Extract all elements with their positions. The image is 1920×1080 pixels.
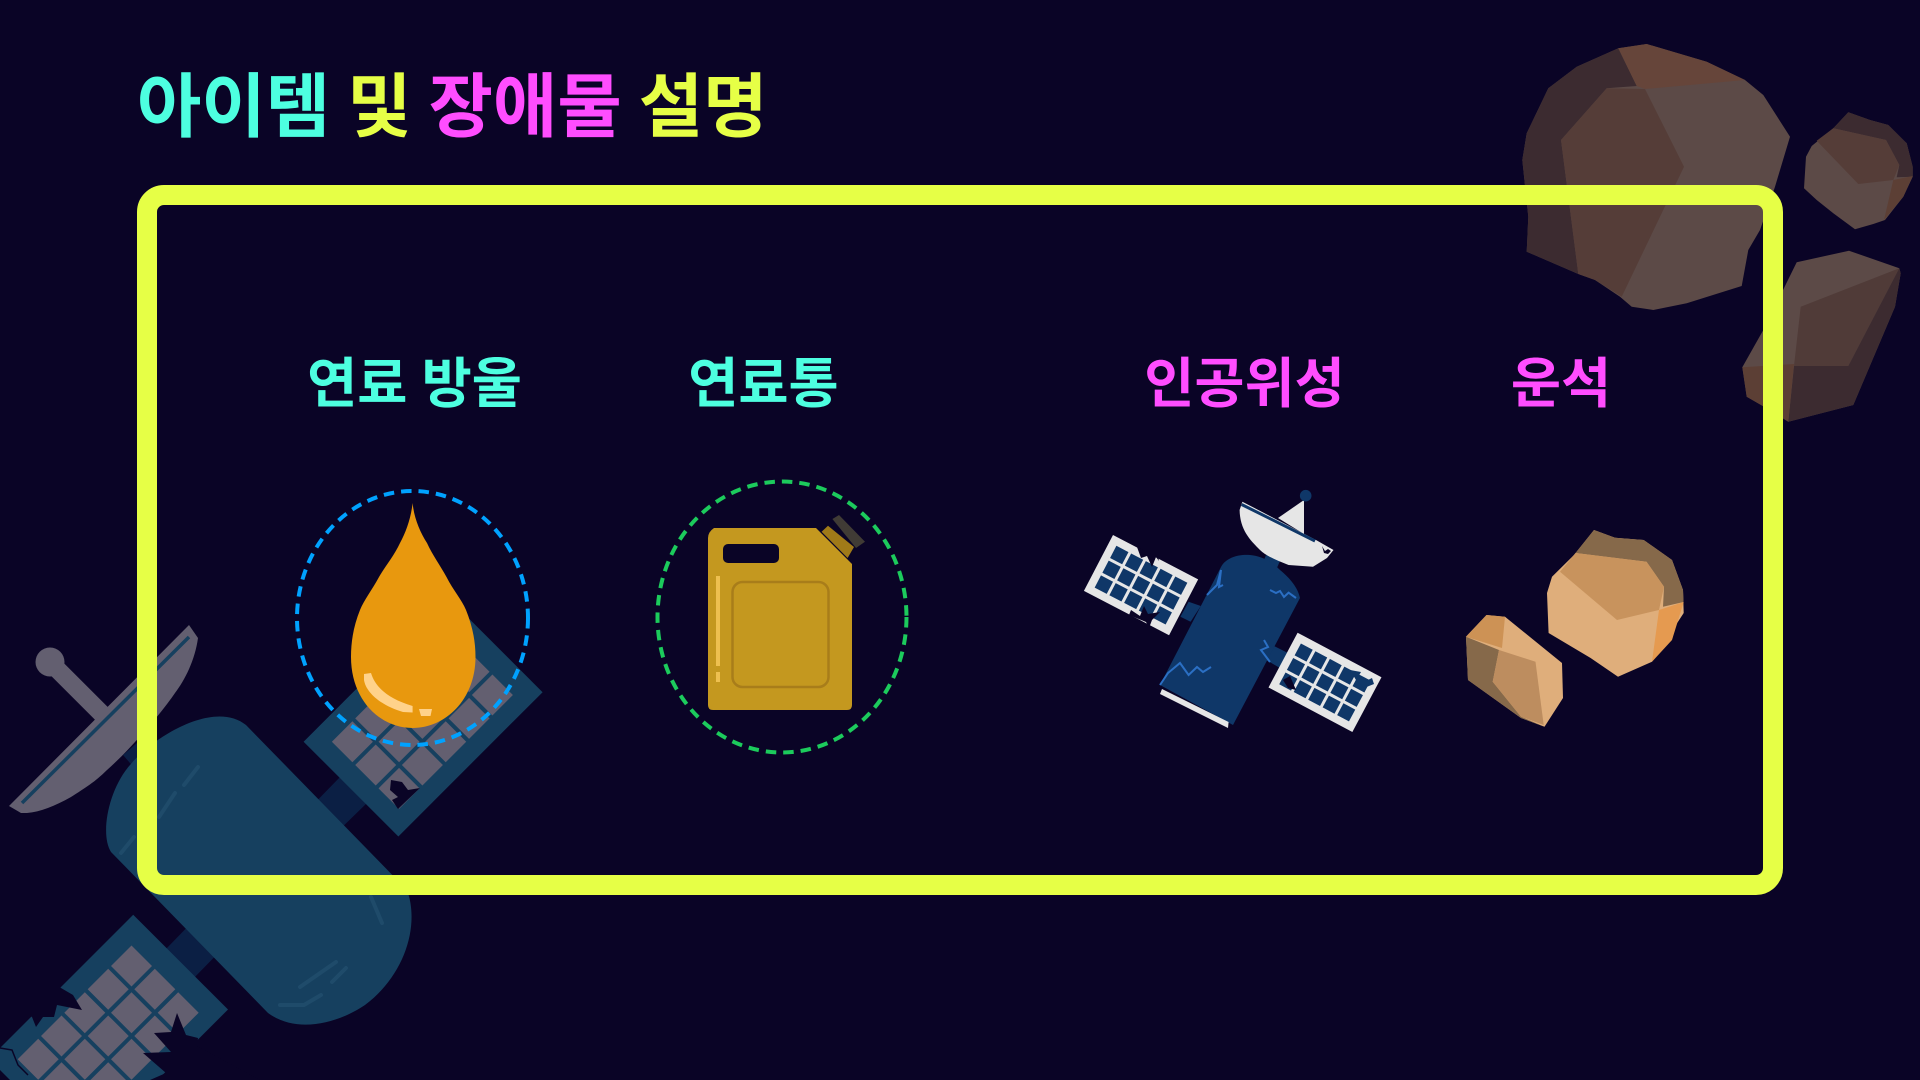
meteor: large rock: [1547, 530, 1684, 677]
background satellite: antenna: [36, 648, 102, 714]
meteor: small rock: [1466, 615, 1563, 727]
background meteor: large rock: [1522, 44, 1790, 310]
background satellite: upper solar panel: [304, 597, 543, 836]
icon: satellite: [1084, 490, 1381, 732]
background meteor: lower rock: [1742, 251, 1901, 422]
background satellite: lower solar panel: [0, 915, 260, 1080]
satellite: left solar panel: [1084, 535, 1198, 635]
satellite: dish: [1240, 490, 1334, 567]
panel: item and obstacle frame: [147, 195, 1773, 885]
satellite: body: [1160, 555, 1300, 728]
label: meteor: 운석: [1511, 354, 1611, 414]
label: fuel can: 연료통: [688, 354, 839, 414]
label: satellite: 인공위성: [1144, 354, 1345, 414]
satellite: right solar panel: [1268, 633, 1381, 732]
title: 아이템 및 장애물 설명: [137, 68, 767, 146]
icon: fuel can: [658, 482, 906, 752]
icon: meteor: [1466, 530, 1684, 727]
icon: fuel drop: [297, 491, 528, 745]
background satellite: [0, 597, 543, 1080]
background satellite: dish: [9, 625, 198, 813]
label: fuel drop: 연료 방울: [307, 354, 522, 414]
background satellite: body: [106, 716, 412, 1025]
background meteor: small rock: [1804, 112, 1913, 229]
